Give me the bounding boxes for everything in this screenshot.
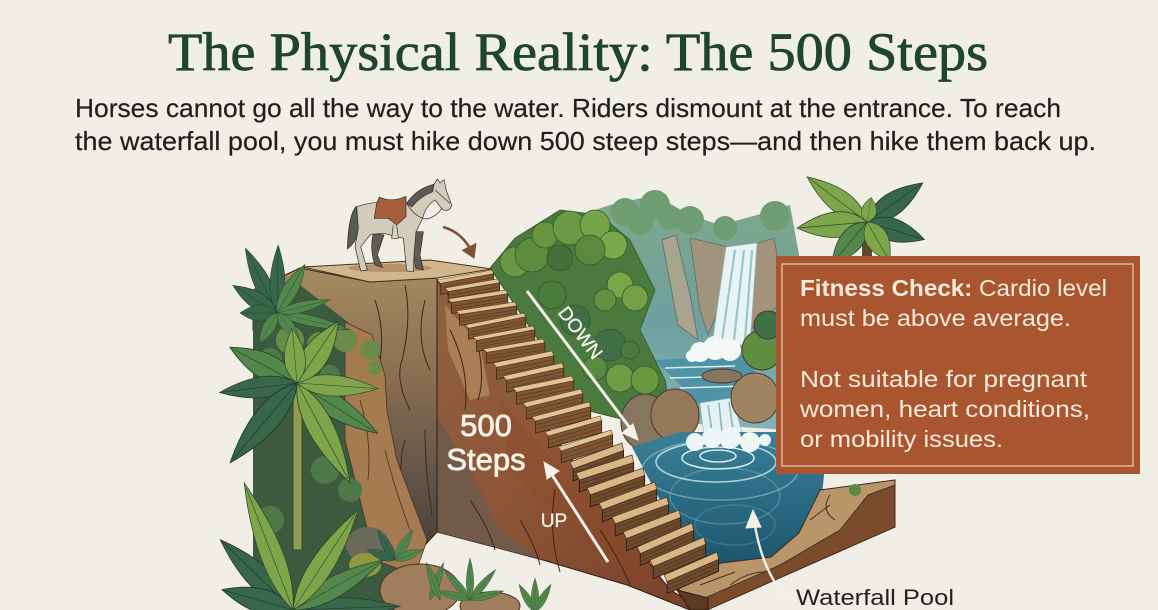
label: 500 steps: 500 (460, 408, 512, 443)
label: down: DOWN (553, 303, 606, 364)
label: up: UP (541, 511, 567, 532)
callout: fitness check: women, heart conditions, (799, 396, 1090, 422)
cliff top ledge (303, 260, 492, 282)
title: The Physical Reality: The 500 Steps (168, 22, 988, 82)
icon: horse standing on the cliff (347, 179, 452, 272)
intro text (75, 93, 1096, 156)
staircase of 500 steps (437, 270, 719, 610)
waterfall (655, 243, 770, 436)
label: 500 steps: Steps (446, 442, 526, 477)
intro text: Horses cannot go all the way to the water. Riders dismount at the entrance. To reach (75, 93, 1061, 123)
callout: fitness check: Fitness Check: Cardio level (800, 275, 1107, 301)
label: waterfall pool: Waterfall Pool (796, 585, 954, 610)
callout: fitness check: or mobility issues. (800, 426, 1003, 452)
small palm plant on top of the cliff (229, 245, 351, 346)
large palm plant on the left (218, 315, 384, 550)
arrow: pointing to the pool (746, 510, 787, 598)
jungle foliage behind the stairs (490, 210, 670, 420)
rocks around the upper pool (621, 311, 782, 450)
small ferns on the jungle floor (365, 527, 554, 610)
intro text: the waterfall pool, you must hike down 500 steep steps—and then hike them back up. (75, 126, 1096, 156)
label: 500 steps (446, 408, 526, 477)
rock bank under the pool (675, 480, 895, 610)
callout: fitness check (776, 256, 1140, 474)
lower foreground plant (212, 479, 400, 610)
dark jungle backdrop on the left of the cliff (253, 285, 520, 610)
rock cliff front face (253, 268, 437, 545)
waterfall pool (632, 427, 825, 565)
callout: fitness check: Not suitable for pregnant (800, 366, 1088, 392)
palm tree behind the callout (796, 168, 929, 271)
callout: fitness check: must be above average. (800, 305, 1071, 331)
illustration: distant misty jungle hills (580, 190, 800, 430)
arrow: up (544, 462, 608, 562)
arrow: from horse to stairs (443, 227, 476, 258)
arrow: down (527, 291, 638, 440)
brown wall under the stairs (437, 280, 705, 610)
